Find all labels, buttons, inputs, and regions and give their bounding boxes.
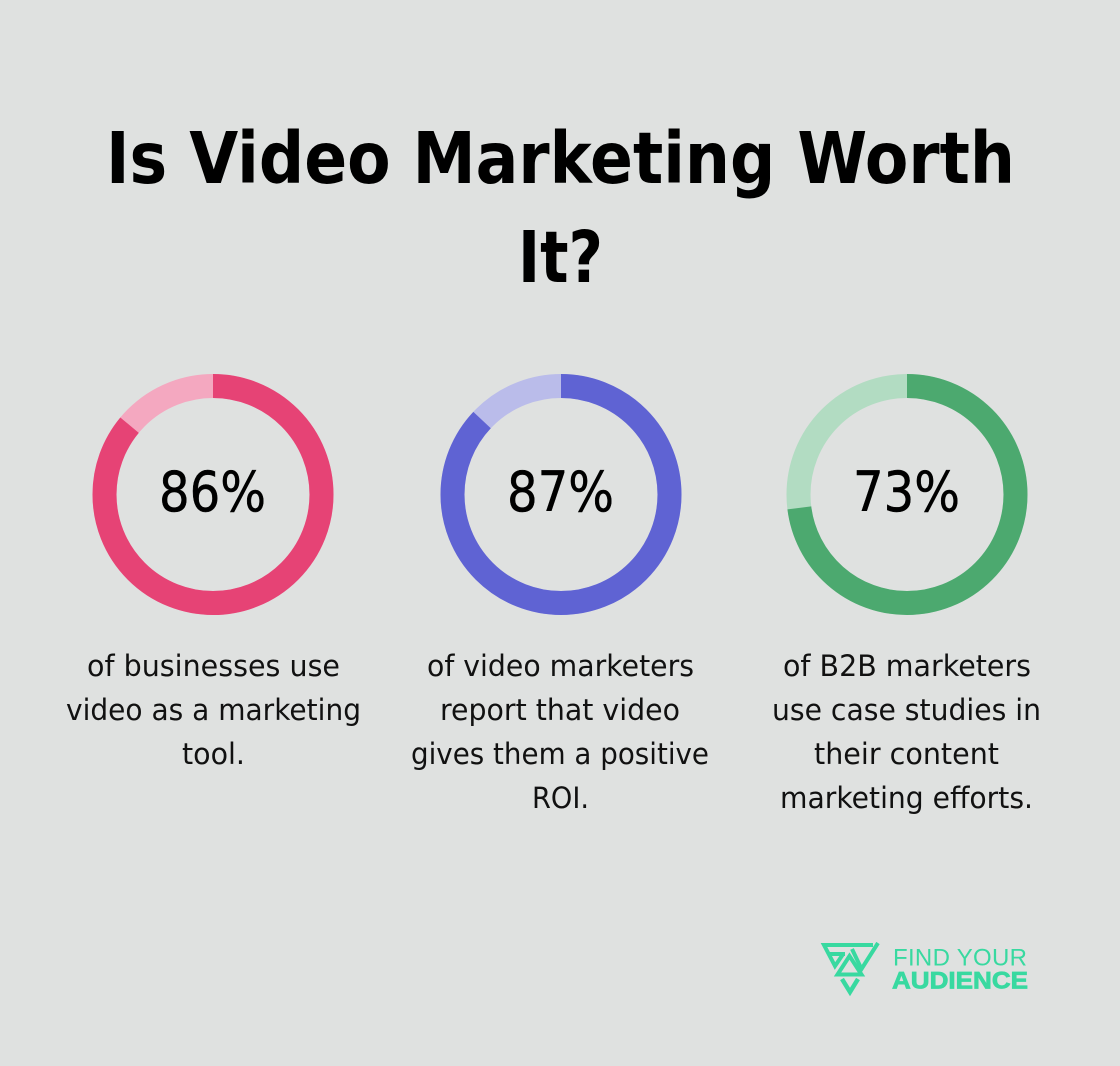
description: video marketers: report that video [440, 693, 680, 727]
panel: 73% stat [772, 386, 1041, 815]
donut chart: 73% [798, 386, 1016, 603]
panel: 87% stat [411, 386, 709, 815]
description: businesses: video as a marketing [66, 693, 361, 727]
donut chart: 86% [104, 386, 322, 603]
title [106, 117, 1015, 299]
description: businesses [66, 649, 361, 771]
description: B2B marketers: of B2B marketers [783, 649, 1031, 683]
wordmark: FIND YOUR [893, 944, 1027, 972]
wordmark: AUDIENCE [892, 968, 1028, 994]
description: businesses: of businesses use [87, 649, 340, 683]
description: video marketers [411, 649, 709, 815]
description: businesses: tool. [182, 737, 245, 771]
logo: Find Your Audience [824, 943, 1028, 994]
icon: logo mark [824, 943, 878, 992]
donut chart: 87% [452, 386, 670, 603]
description: B2B marketers: use case studies in [772, 693, 1041, 727]
description: B2B marketers: marketing efforts. [780, 781, 1033, 815]
title: Is Video Marketing Worth [106, 117, 1015, 200]
value: 86%: 86% [159, 460, 266, 524]
description: video marketers: ROI. [532, 781, 589, 815]
description: B2B marketers: their content [814, 737, 999, 771]
value: 73%: 73% [853, 460, 960, 524]
value: 87%: 87% [507, 460, 614, 524]
title: It? [518, 216, 603, 299]
description: B2B marketers [772, 649, 1041, 815]
description: video marketers: of video marketers [427, 649, 694, 683]
panel: 86% stat [66, 386, 361, 771]
wordmark [892, 944, 1028, 994]
description: video marketers: gives them a positive [411, 737, 709, 771]
